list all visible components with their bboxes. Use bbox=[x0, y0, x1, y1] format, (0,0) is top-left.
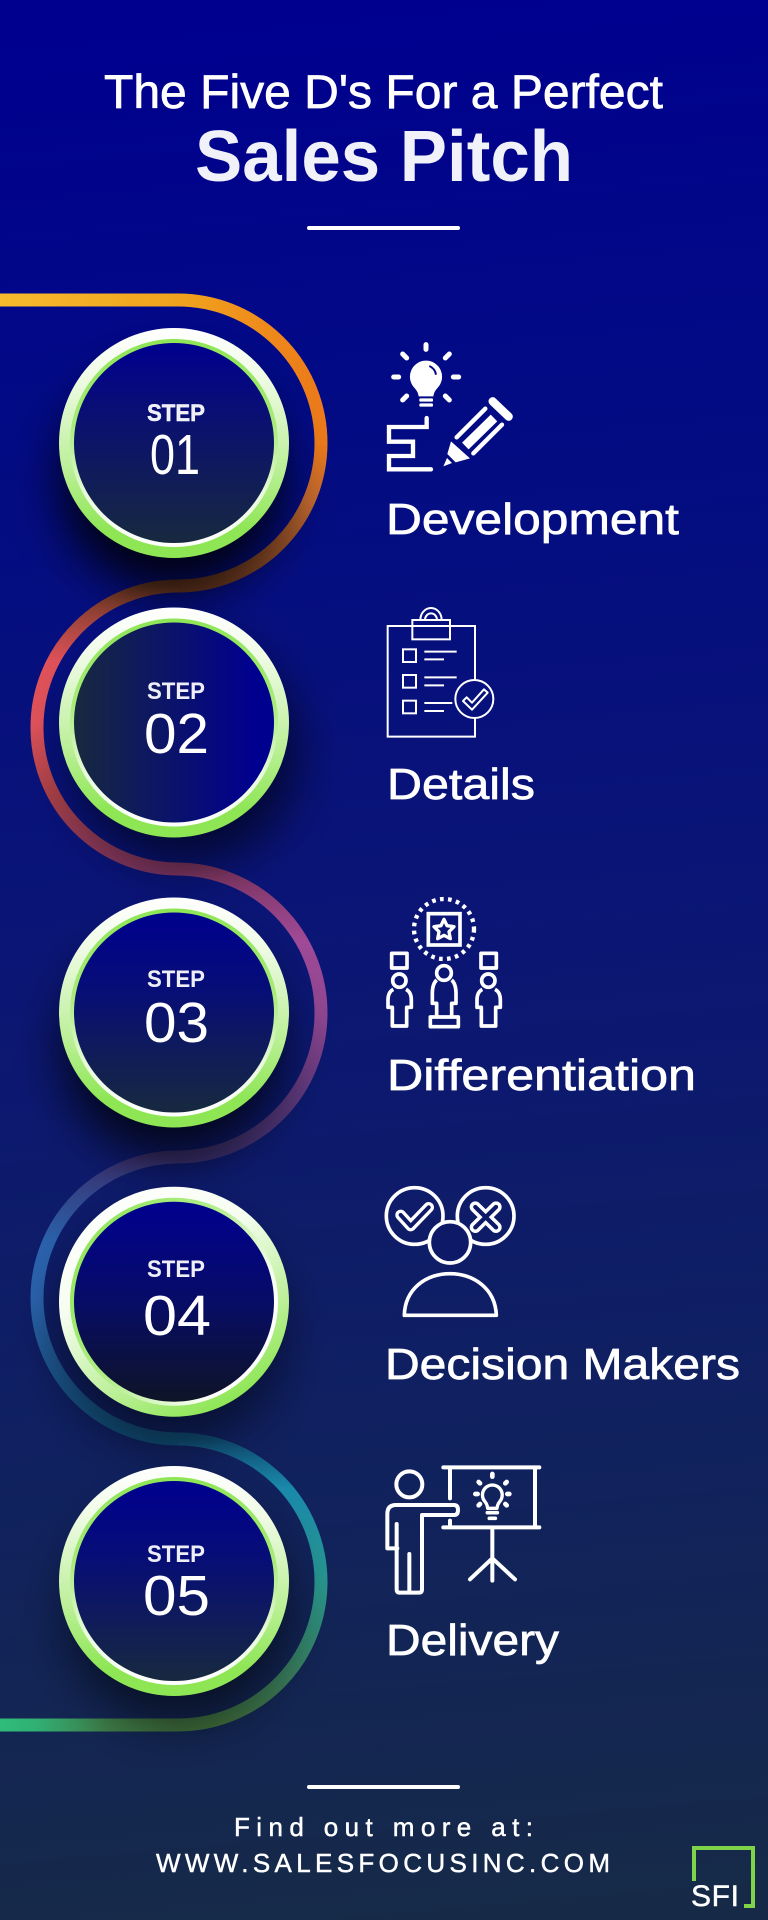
step 02 badge: STEP bbox=[147, 678, 205, 705]
step 03 badge: 03 bbox=[144, 991, 209, 1055]
label: Decision Makers: Decision Makers bbox=[385, 1340, 740, 1389]
footer call to action: WWW.SALESFOCUSINC.COM bbox=[156, 1848, 610, 1878]
step 04 badge: STEP bbox=[147, 1256, 205, 1283]
step 04 badge: 04 bbox=[143, 1284, 211, 1348]
footer call to action bbox=[156, 1785, 610, 1878]
icon: clipboard checklist bbox=[388, 608, 493, 737]
footer call to action: Find out more at: bbox=[234, 1812, 533, 1842]
step 01 badge: STEP bbox=[147, 400, 205, 427]
step 03 badge: STEP bbox=[147, 966, 205, 993]
SFI logo: SFI bbox=[691, 1880, 739, 1913]
step 02 badge bbox=[59, 608, 289, 838]
icon: presenter with board bbox=[387, 1467, 539, 1593]
step 05 badge: STEP bbox=[147, 1541, 205, 1568]
step 04 badge bbox=[59, 1187, 289, 1417]
icon: lightbulb, maze and pencil bbox=[389, 345, 509, 469]
label: Details: Details bbox=[387, 760, 535, 809]
title: Sales Pitch bbox=[195, 117, 573, 197]
step 01 badge bbox=[59, 328, 289, 558]
title: The Five D's For a Perfect bbox=[104, 65, 663, 118]
step 03 badge bbox=[59, 898, 289, 1128]
circle drop shadows bbox=[60, 368, 297, 1724]
step 02 badge: 02 bbox=[144, 702, 209, 766]
label: Differentiation: Differentiation bbox=[387, 1051, 696, 1100]
icon: decision maker bbox=[386, 1188, 514, 1315]
label: Delivery: Delivery bbox=[386, 1616, 559, 1665]
step 05 badge: 05 bbox=[143, 1564, 210, 1628]
gradient connector path bbox=[0, 300, 321, 1725]
icon: three people with star award bbox=[388, 899, 500, 1027]
step 05 badge bbox=[59, 1466, 289, 1696]
title bbox=[104, 65, 663, 230]
SFI logo bbox=[691, 1848, 753, 1913]
step 01 badge: 01 bbox=[150, 423, 200, 487]
label: Development: Development bbox=[386, 495, 679, 544]
